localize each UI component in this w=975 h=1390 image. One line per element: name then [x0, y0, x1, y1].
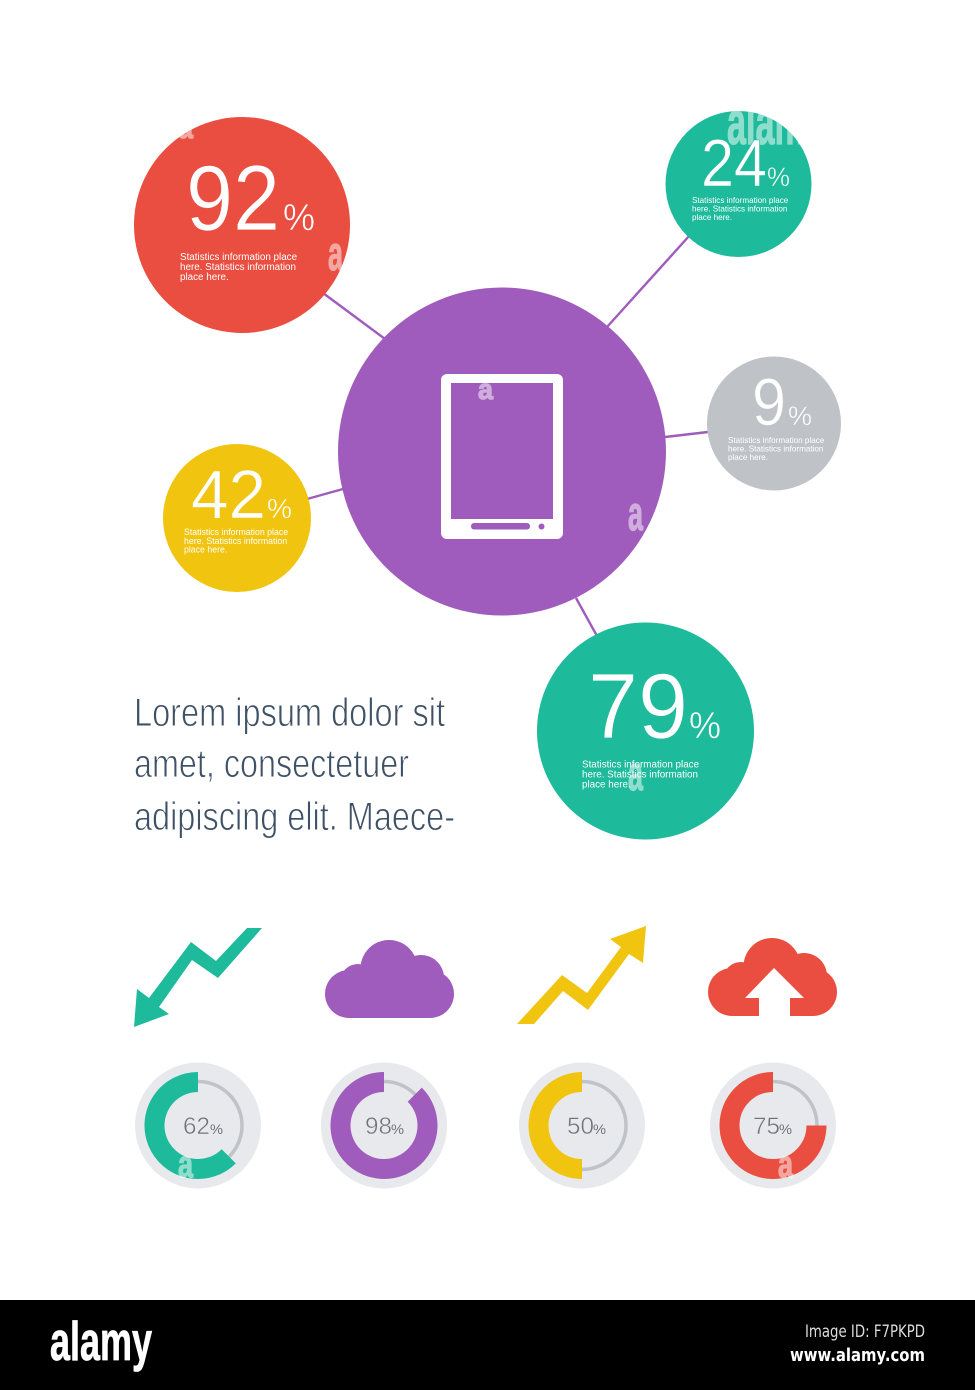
stat bubble: 24%: place here.	[692, 213, 732, 222]
donut chart: 75%	[710, 1062, 836, 1188]
stat bubble: 9%: place here.	[728, 453, 768, 462]
stat bubble: 79%: place here.	[582, 780, 631, 790]
image id: Image ID: F7PKPD	[805, 1322, 925, 1342]
stat bubble: 24%	[666, 111, 812, 257]
stat bubble: 92%: %	[283, 197, 315, 239]
stat bubble: 24%: alam	[727, 89, 805, 158]
stat bubble: 92%: a	[178, 108, 194, 146]
stat bubble: 92%	[134, 108, 350, 333]
lorem ipsum text block: Lorem ipsum dolor sit	[134, 691, 445, 735]
donut chart: 50%: 50	[567, 1113, 594, 1140]
stat bubble: 24%: 24	[701, 126, 767, 201]
footer logo: alamy	[50, 1310, 152, 1372]
stat bubble: 9%: %	[788, 401, 812, 431]
donut chart: 98%: 98	[365, 1113, 392, 1140]
icon: tablet	[441, 374, 563, 539]
stat bubble: 79%: Statistics information place	[582, 760, 700, 770]
stat bubble: 24%: here. Statistics information	[692, 204, 787, 214]
donut chart: 62%: 62	[183, 1113, 210, 1140]
stat bubble: 92%: place here.	[180, 272, 229, 283]
central hub with tablet icon: a	[478, 374, 494, 406]
stat bubble: 9%: Statistics information place	[728, 436, 825, 445]
stat bubble: 79%: 79	[588, 654, 688, 758]
website url: www.alamy.com	[790, 1345, 925, 1366]
stat bubble: 92%: here. Statistics information	[180, 262, 296, 273]
stat bubble: 9%: here. Statistics information	[728, 444, 823, 454]
stat bubble: 79%	[537, 622, 754, 840]
icon: falling arrow	[134, 928, 262, 1027]
donut chart: 75%: %	[779, 1121, 792, 1137]
stat bubble: 42%	[163, 444, 311, 592]
lorem ipsum text block	[134, 691, 455, 839]
stat bubble: 92%: a	[328, 228, 343, 281]
stat bubble: 42%: %	[267, 493, 292, 524]
donut chart: 98%	[321, 1062, 447, 1188]
connector lines	[307, 235, 708, 636]
donut chart: 98%: %	[391, 1121, 404, 1137]
stat bubble: 92%: Statistics information place	[180, 252, 298, 263]
icon: rising arrow	[517, 926, 646, 1024]
stat bubble: 9%: 9	[752, 365, 786, 440]
lorem ipsum text block: amet, consectetuer	[134, 742, 409, 786]
donut chart: 75%: a	[778, 1144, 794, 1186]
icon: cloud upload	[708, 938, 837, 1017]
donut chart: 62%	[135, 1062, 261, 1188]
donut chart: 62%: a	[178, 1144, 194, 1186]
stat bubble: 42%: 42	[191, 456, 266, 533]
stat bubble: 92%: 92	[186, 146, 280, 250]
donut chart: 75%: 75	[753, 1113, 780, 1140]
stat bubble: 79%: %	[689, 705, 721, 747]
central hub with tablet icon: a	[628, 488, 643, 541]
stat bubble: 79%: a	[628, 748, 643, 801]
donut chart: 62%: %	[210, 1121, 223, 1137]
stat bubble: 24%: Statistics information place	[692, 196, 789, 205]
donut chart: 50%	[519, 1062, 645, 1188]
stat bubble: 42%: Statistics information place	[184, 527, 288, 537]
footer bar	[0, 1300, 975, 1390]
stat bubble: 79%: here. Statistics information	[582, 770, 698, 780]
lorem ipsum text block: adipiscing elit. Maece-	[134, 795, 455, 839]
stat bubble: 42%: place here.	[184, 544, 227, 554]
stat bubble: 24%: %	[767, 162, 790, 192]
central hub with tablet icon	[338, 288, 666, 616]
icon: cloud	[325, 940, 454, 1018]
stat bubble: 9%	[707, 356, 841, 490]
donut chart: 50%: %	[593, 1121, 606, 1137]
stat bubble: 42%: here. Statistics information	[184, 536, 287, 546]
